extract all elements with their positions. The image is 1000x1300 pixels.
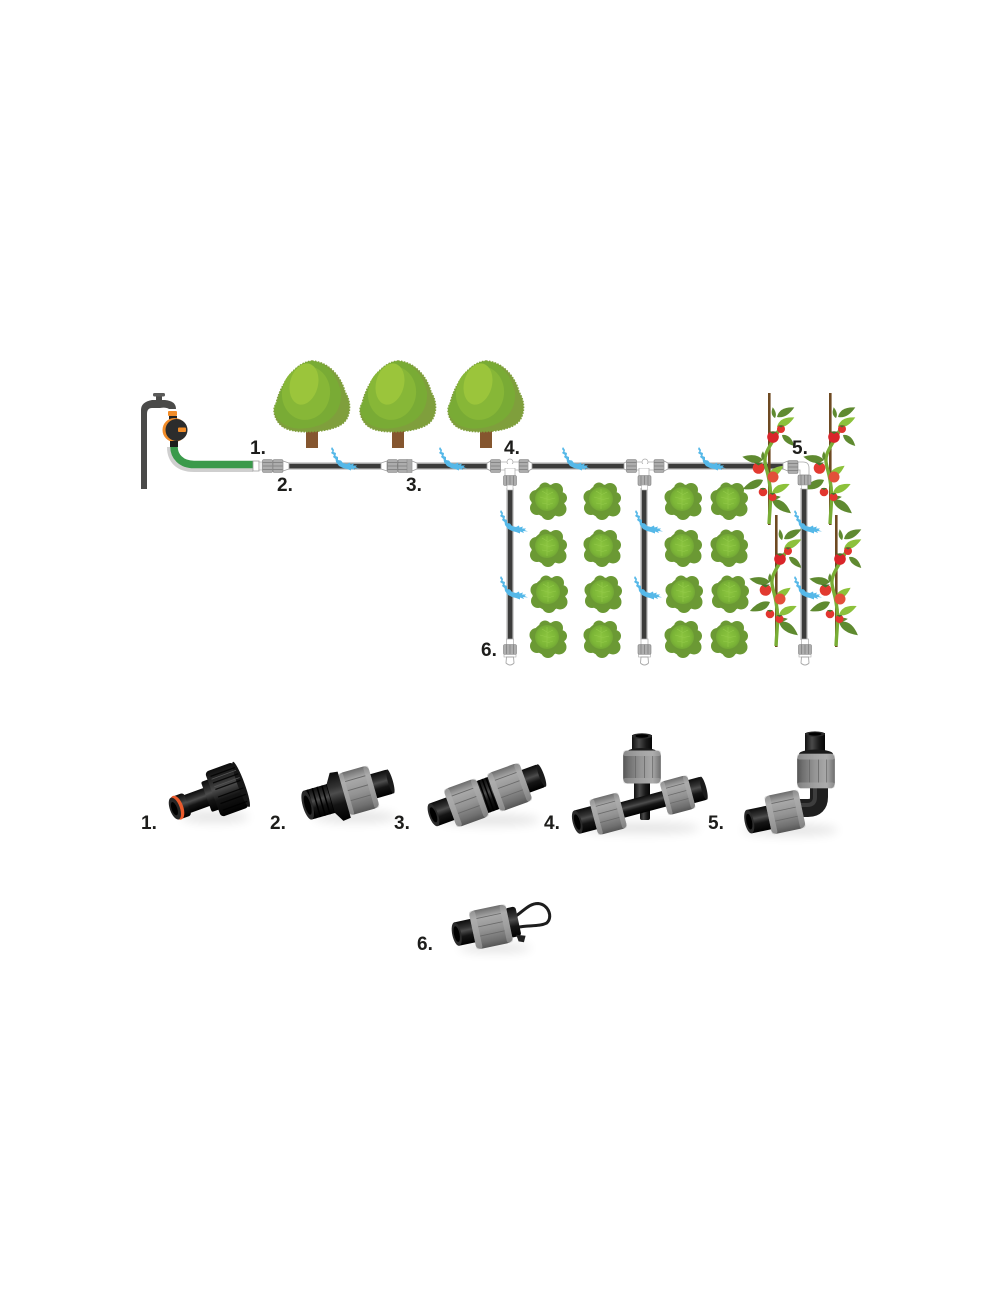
lateral pipe 1	[506, 488, 514, 640]
diagram fitting 3	[381, 460, 417, 472]
label: diagram 2: 2.	[277, 475, 293, 496]
label: diagram 3: 3.	[406, 475, 422, 496]
label: photo 6: 6.	[417, 934, 433, 955]
label: photo 3: 3.	[394, 813, 410, 834]
diagram tee fitting second lateral	[624, 459, 668, 490]
product photo 3: straight coupling	[422, 756, 551, 835]
label: diagram 6: 6.	[481, 640, 497, 661]
product photo 5: elbow fitting	[740, 731, 838, 840]
label: photo 4: 4.	[544, 813, 560, 834]
product photo 2: threaded adapter	[296, 757, 400, 831]
lateral pipe 3	[800, 488, 808, 640]
cabbage beds	[530, 482, 749, 658]
label: diagram 5: 5.	[792, 438, 808, 459]
label: photo 2: 2.	[270, 813, 286, 834]
product photo 1: tap connector	[162, 761, 253, 833]
main supply pipe	[288, 462, 783, 470]
water sprays	[331, 447, 822, 600]
diagram end caps 6	[504, 639, 812, 665]
diagram tee fitting 4	[487, 459, 532, 490]
diagram elbow fitting 5	[783, 460, 811, 489]
diagram fittings 1 and 2	[253, 460, 289, 472]
label: diagram 4: 4.	[504, 438, 520, 459]
icon: garden tap with water timer	[141, 393, 188, 489]
product photo 6: end cap with loop	[448, 895, 554, 957]
label: photo 5: 5.	[708, 813, 724, 834]
lateral pipe 2	[640, 488, 648, 640]
label: diagram 1: 1.	[250, 438, 266, 459]
garden hose	[172, 447, 253, 467]
product photo 4: tee fitting	[568, 733, 711, 841]
trees	[274, 360, 524, 448]
tomato plants	[741, 393, 864, 647]
label: photo 1: 1.	[141, 813, 157, 834]
